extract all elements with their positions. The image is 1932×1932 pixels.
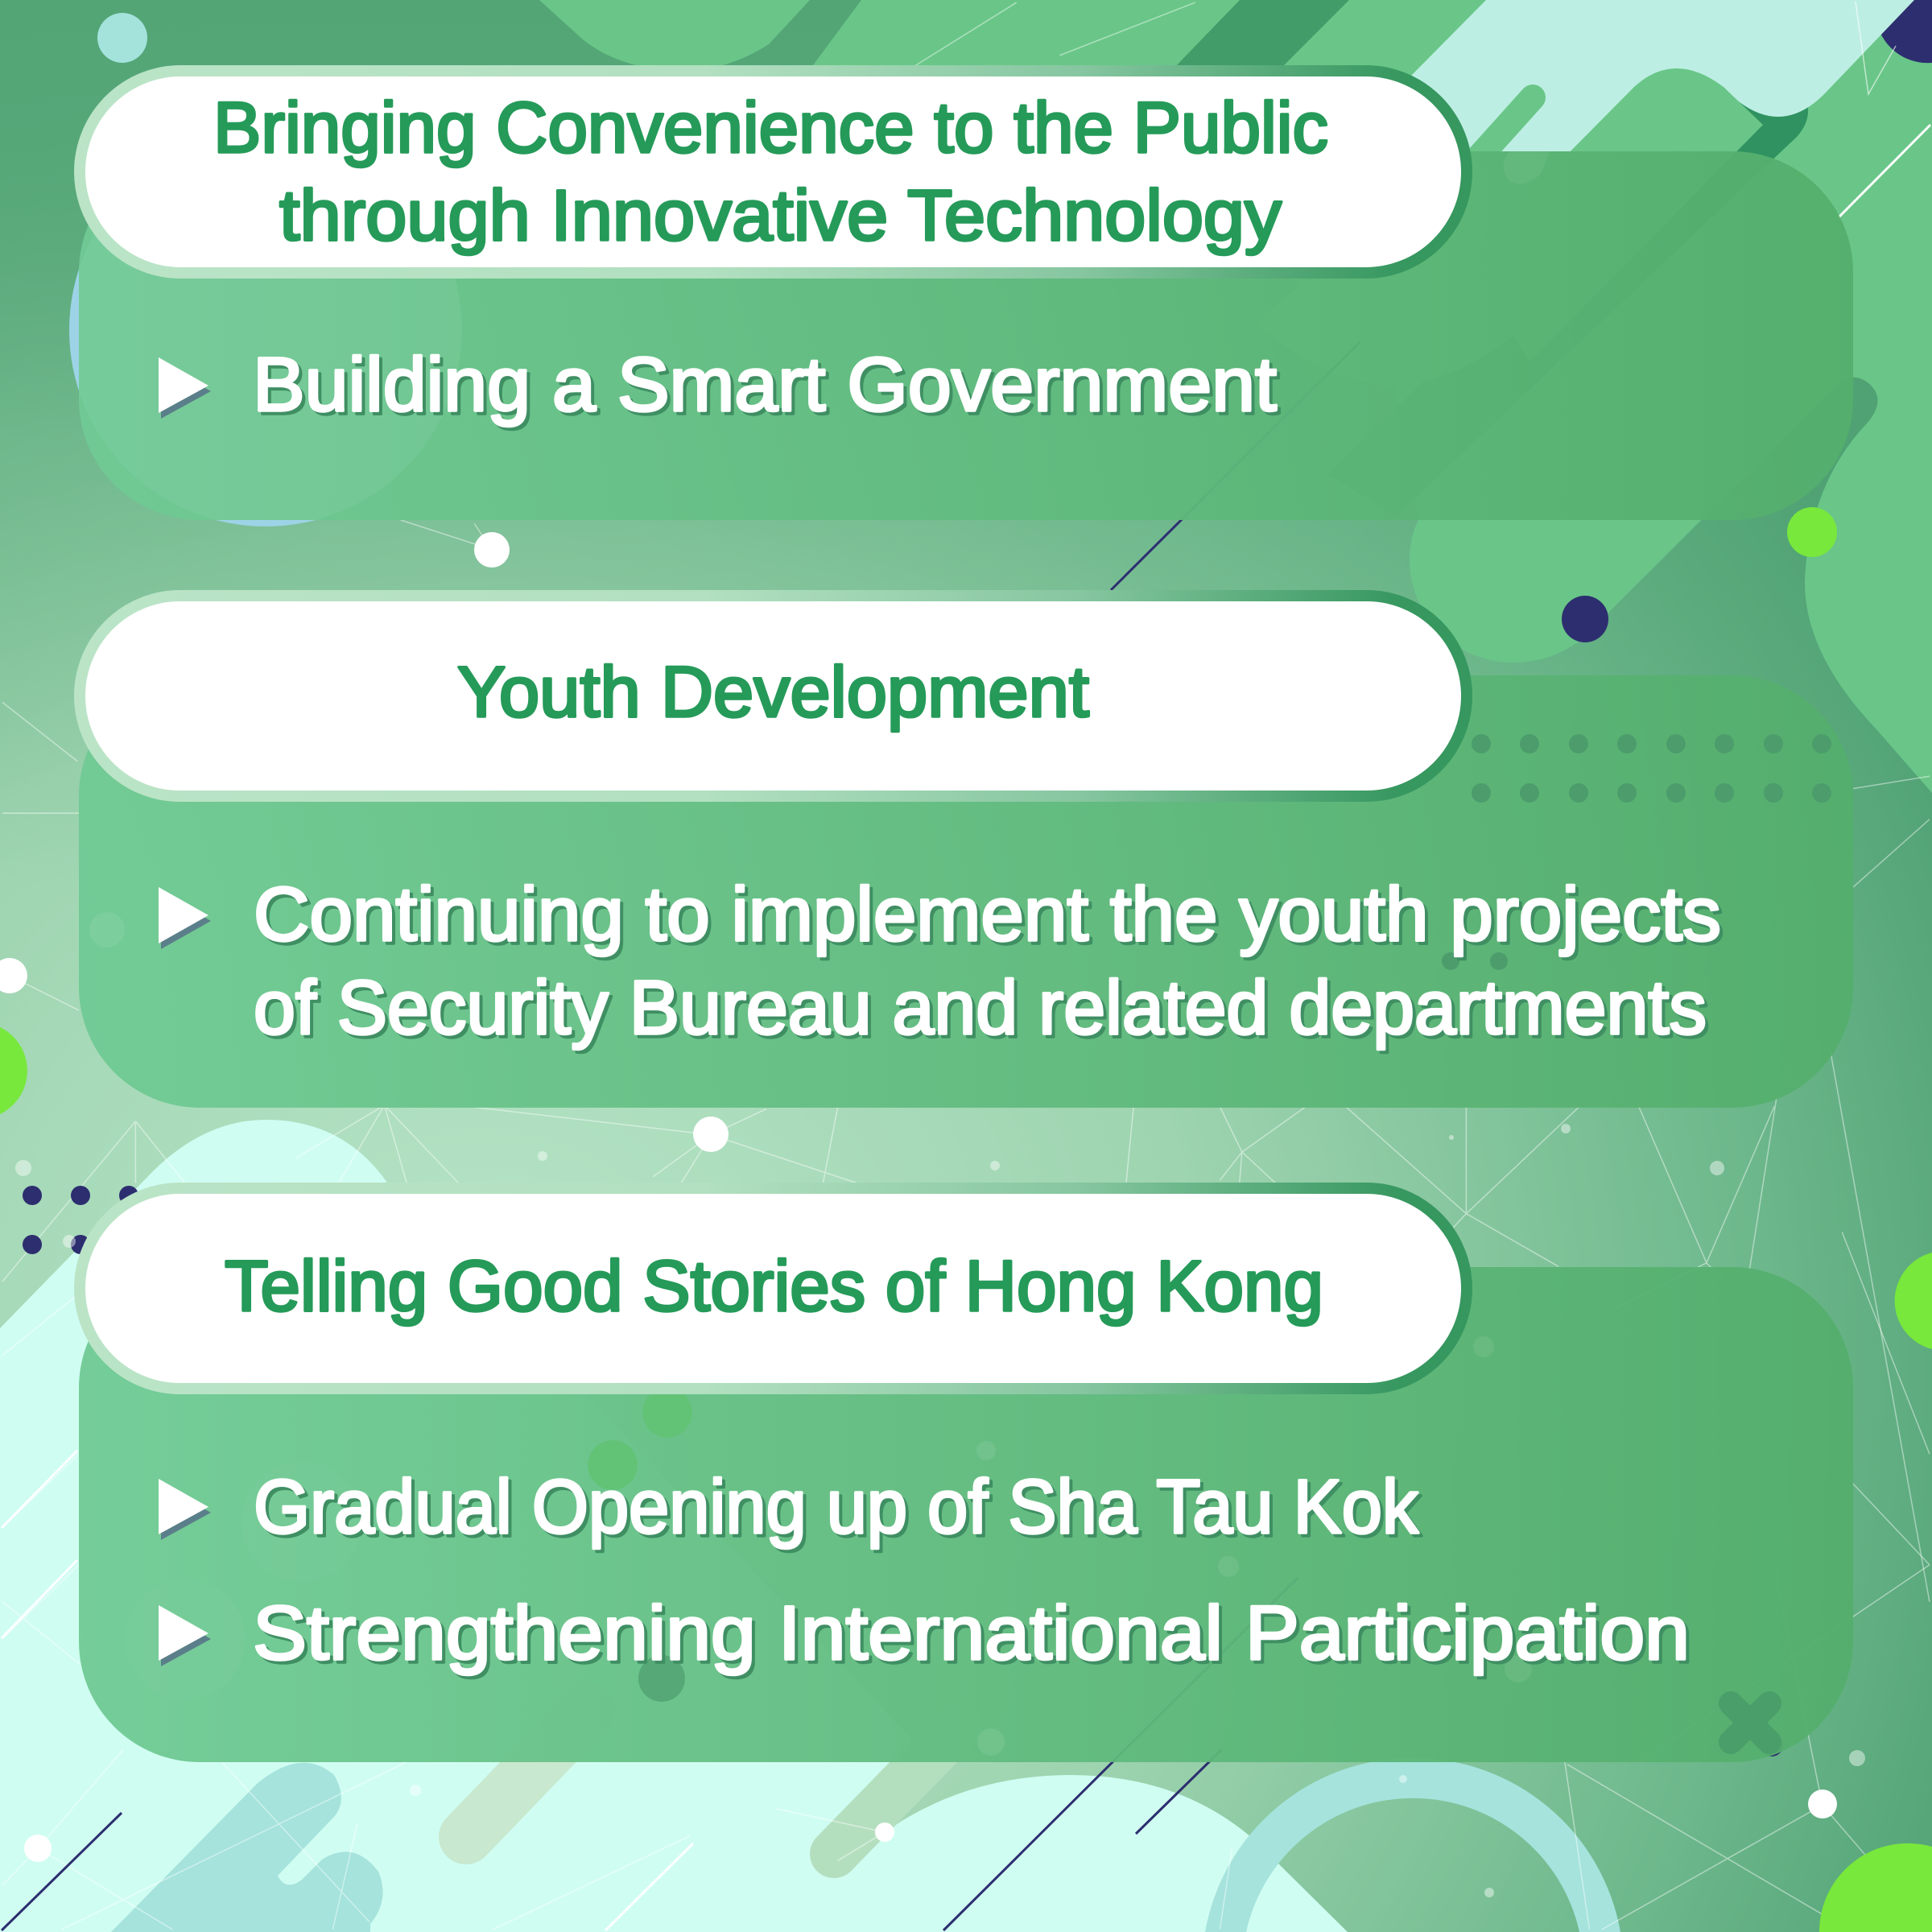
dot grid in second panel	[1442, 734, 1831, 970]
white diagonal lines, bottom left	[2, 1451, 693, 1930]
shape: light band, bottom centre	[834, 1727, 958, 1854]
text: bullet: Gradual Opening up of Sha Tau Kok	[254, 1464, 1418, 1550]
shape: large green field, top right	[813, 0, 1932, 793]
lime circle, bottom right	[1819, 1843, 1932, 1932]
faint dots in panels	[89, 912, 1532, 1756]
shape: pale mint area, bottom left	[0, 1120, 1348, 1932]
shape: dark diagonal band, upper	[1014, 0, 1349, 233]
icon: triangle bullet	[159, 357, 211, 419]
panel: third content card	[79, 1267, 1853, 1762]
heading: Bringing Convenience: Bringing Convenience to the Public	[213, 87, 1328, 167]
shape: green streak over mint	[1461, 97, 1533, 177]
darker dot in third panel	[638, 1655, 685, 1702]
icon: X mark	[1731, 1703, 1769, 1742]
navy dot grid, left	[23, 1186, 138, 1254]
text: bullet line two: of Security Bureau and related departments	[254, 965, 1707, 1051]
lime circle, left	[0, 1027, 27, 1114]
item: youth projects	[159, 872, 1721, 1051]
background top shading	[0, 0, 1932, 886]
white network nodes	[0, 532, 1837, 1862]
shape: rounded band under first panel	[1256, 161, 1690, 386]
teal circle, top left	[97, 13, 147, 63]
heading: Telling Good Stories: Telling Good Stories of Hong Kong	[225, 1245, 1323, 1326]
shape: green band over mint	[1465, 68, 1763, 362]
icon: triangle bullet	[159, 1479, 211, 1540]
faint streak end inside first panel	[1504, 151, 1550, 184]
panel: first content card	[79, 151, 1853, 520]
navy diagonal lines	[2, 341, 1360, 1930]
icon: triangle bullet	[159, 887, 211, 949]
icon: triangle bullet	[159, 1605, 211, 1666]
pill: heading one	[80, 71, 1467, 273]
shape: mint block, top right	[1410, 0, 1914, 151]
navy dot, below first panel	[1562, 596, 1608, 642]
text: bullet line one: Continuing to implement the youth projects	[254, 872, 1721, 957]
pill: heading two	[80, 596, 1467, 796]
small pale dots	[15, 1124, 1865, 1897]
green dots in third panel	[588, 1388, 692, 1490]
item: Sha Tau Kok	[159, 1464, 1418, 1550]
shape: teal band, bottom left	[111, 1763, 383, 1932]
very faint circles in third panel	[125, 1461, 362, 1699]
icon: navy circle, top right	[1876, 0, 1932, 63]
navy dot behind third panel	[1761, 1734, 1783, 1757]
pill: heading three	[80, 1188, 1467, 1389]
shape: light blue circle behind first panel	[69, 134, 462, 526]
shape: light band, bottom centre-left	[466, 1711, 588, 1837]
lighter circle inside first panel	[69, 134, 462, 526]
shape: top blob	[539, 0, 810, 71]
item: Building a Smart Government	[159, 342, 1277, 427]
white diagonal line, top right	[1838, 125, 1930, 218]
shape: teal ring, bottom	[1205, 1758, 1620, 1932]
shape: dark diagonal band, right	[1328, 87, 1808, 515]
heading: Youth Development: Youth Development	[457, 651, 1089, 732]
lime dot, right of first panel	[1787, 507, 1837, 557]
panel: second content card	[79, 675, 1853, 1108]
text: bullet: Building a Smart Government	[253, 342, 1277, 427]
item: International Participation	[159, 1591, 1690, 1676]
heading: through Innovative Technology: through Innovative Technology	[279, 175, 1282, 255]
network lines, top right	[1856, 2, 1896, 94]
text: bullet: Strengthening International Participation	[253, 1591, 1690, 1676]
panel overlays: dots and marks	[69, 134, 1831, 1756]
lime circle, right	[1895, 1253, 1932, 1349]
